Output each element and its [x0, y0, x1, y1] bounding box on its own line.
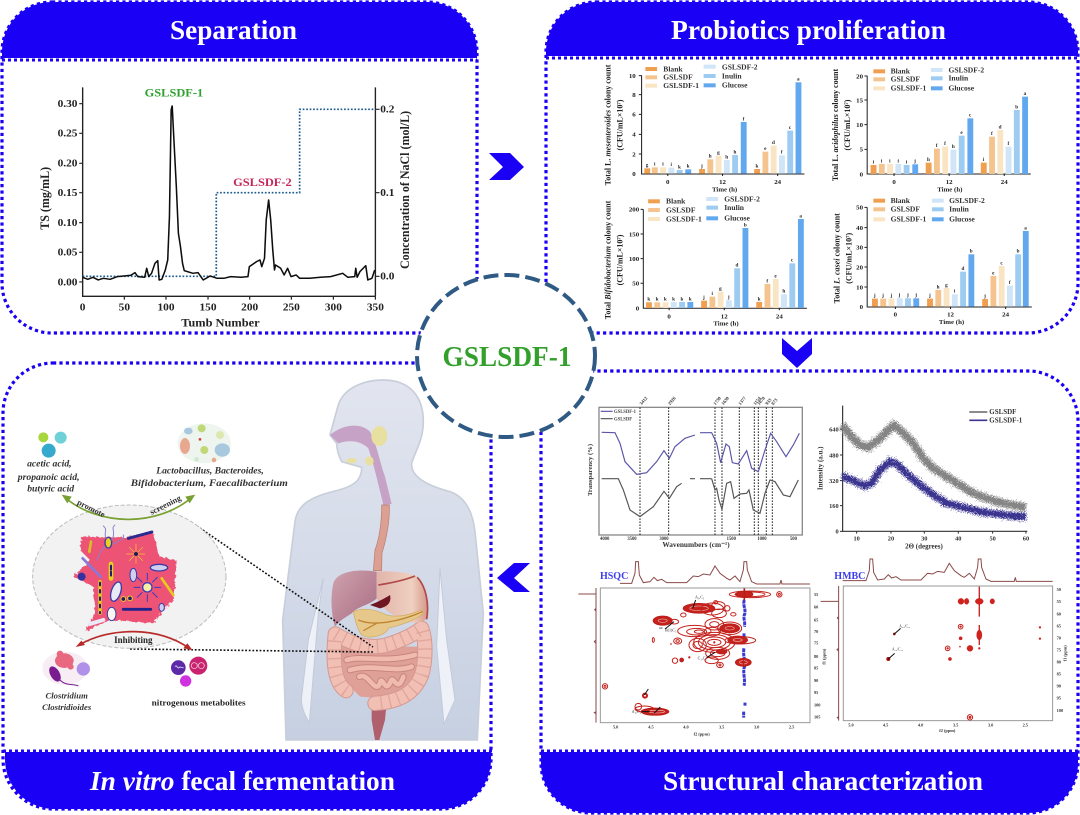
microbe blob [73, 533, 177, 632]
chart: XRD patterns: 30 [921, 535, 927, 542]
chart: HMBC spectrum: f2 (ppm) [939, 728, 956, 733]
chart: elution profile: 50 [119, 302, 130, 314]
panel: separation [2, 2, 477, 333]
chart: elution profile: 0.15 [58, 187, 78, 199]
chart: HSQC spectrum: 2.5 [789, 724, 794, 729]
stomach shadow [370, 595, 390, 608]
chart: HSQC spectrum: HSQC [600, 571, 628, 582]
label: clostridium [42, 690, 92, 712]
chart: HSQC spectrum: A₁,C₁ [632, 709, 642, 715]
chart: XRD patterns: Intensity (a.u.) [816, 446, 824, 490]
chart: FTIR spectra: 1078 [757, 396, 767, 407]
heading: Separation: Separation [170, 15, 297, 45]
chart: FTIR spectra: 1730 [713, 396, 723, 407]
panel: in vitro fecal fermentation [3, 363, 494, 809]
bar chart: L. acidophilus: GSLSDF [891, 75, 920, 84]
chart: elution profile: 350 [367, 302, 384, 314]
bar chart: L. casei: GSLSDF [891, 205, 920, 214]
bar chart: L. mesenteroides: 0 [632, 171, 636, 178]
chart: XRD patterns: 50 [989, 535, 996, 542]
chart: HMBC spectrum: 4.0 [918, 723, 923, 728]
bar chart: L. casei: jjjjjjjhgidbjecfba [873, 225, 1027, 299]
bar chart: L. mesenteroides: 6 [632, 112, 636, 119]
bar chart: L. acidophilus: 24 [1001, 179, 1008, 186]
chart: FTIR spectra: 1630 [721, 396, 731, 407]
bar chart: L. acidophilus: (CFU/mL×10⁷) [843, 99, 852, 150]
bar chart: L. casei: 12 [947, 312, 955, 319]
chart: HMBC spectrum: 4.5 [883, 723, 888, 728]
chart: HSQC spectrum: 4.5 [648, 724, 654, 729]
bar chart: L. acidophilus: 0 [892, 179, 896, 186]
bar chart: Bifidobacterium: GSLSDF [666, 205, 696, 214]
chart: elution profile [38, 86, 412, 330]
chart: elution profile: Concentration of NaCl (mol/L) [398, 111, 412, 269]
chart: HSQC spectrum: 5.0 [613, 724, 618, 729]
label: probiotic genera: Lactobacillus, Bacteroides, [155, 465, 264, 476]
chart: HSQC spectrum: 105 [814, 715, 820, 720]
chart: FTIR spectra: 2926 [668, 396, 678, 407]
bar chart: L. mesenteroides: giiikkjhghhfkedfca [646, 77, 800, 170]
bar chart: L. acidophilus: Inulin [948, 74, 969, 83]
label: probiotic genera: Bifidobacterium, Faecalibacterium [130, 478, 288, 489]
chart: HMBC spectrum: A₂₆/C₁ₐ [899, 624, 910, 628]
chart: HMBC spectrum: 55 [1057, 599, 1061, 604]
bar chart: Bifidobacterium [603, 194, 807, 328]
chart: elution profile: 0.0 [380, 271, 395, 283]
chart: HMBC spectrum [821, 559, 1068, 733]
chart: elution profile: 0.1 [380, 187, 394, 199]
label: acids [17, 459, 80, 495]
icon: nitrogenous metabolites [171, 657, 207, 687]
bar chart: Bifidobacterium: 0 [636, 305, 640, 312]
chart: XRD patterns: 320 [829, 478, 839, 485]
panel: structural characterization [541, 371, 1078, 813]
chart: FTIR spectra: GSLSDF [614, 417, 632, 422]
bar chart: L. mesenteroides: Glucose [722, 81, 748, 90]
salivary glands [346, 426, 387, 466]
chart: HMBC spectrum: 50 [1057, 587, 1061, 592]
label: nitrogenous metabolites: nitrogenous metabolites [152, 698, 246, 707]
bar chart: Bifidobacterium: 150 [629, 231, 640, 238]
chart: HMBC spectrum: 95 [1057, 696, 1061, 701]
chart: HSQC spectrum: 70 [814, 629, 818, 634]
chart: elution profile: 0.30 [58, 98, 78, 110]
chart: elution profile: 100 [157, 302, 175, 314]
bar chart: Bifidobacterium: Glucose [724, 214, 751, 223]
illustration: digestive organs [332, 570, 428, 740]
bar chart: L. acidophilus: Glucose [948, 84, 975, 93]
bar chart: L. acidophilus: GSLSDF-1 [891, 84, 927, 93]
label: acids: propanoic acid, [17, 472, 80, 483]
chart: FTIR spectra: 4000 [600, 537, 610, 542]
heading: Structural characterization: Structural characterization [663, 766, 983, 796]
chart: elution profile: 250 [283, 302, 300, 314]
chart: elution profile: GSLSDF-2 [233, 175, 292, 189]
chart: FTIR spectra: 873 [771, 398, 780, 407]
bar chart: L. casei [833, 196, 1032, 326]
bar chart: L. casei: 24 [1002, 312, 1010, 319]
bar chart: Bifidobacterium: Time (h) [713, 321, 739, 328]
chart: XRD patterns: 60 [1023, 535, 1029, 542]
chart: XRD patterns: 40 [955, 535, 961, 542]
bar chart: L. acidophilus: 15 [856, 97, 864, 104]
chart: HSQC spectrum: A₃,C₃ [695, 594, 705, 600]
chart: HMBC spectrum: 3.0 [988, 723, 993, 728]
chart: elution profile: 0.00 [58, 276, 78, 288]
microbiota oval [33, 505, 226, 648]
arrow: probiotics to structure [782, 338, 812, 368]
chart: HSQC spectrum: 75 [814, 641, 818, 646]
chart: HSQC spectrum: 3.0 [754, 724, 759, 729]
chart: FTIR spectra: 3412 [639, 396, 650, 407]
chart: XRD patterns: 640 [829, 427, 839, 434]
chart: elution profile: Tumb Number [181, 316, 260, 330]
bar chart: Bifidobacterium: GSLSDF-2 [724, 194, 760, 203]
bar chart: L. acidophilus: 5 [860, 147, 864, 154]
esophagus [373, 505, 389, 571]
bar chart: Bifidobacterium: Inulin [724, 203, 745, 212]
heading: Probiotics proliferation: Probiotics proliferation [671, 15, 946, 45]
icon: probiotic bacteria [178, 423, 231, 463]
chart: XRD patterns: GSLSDF-1 [989, 416, 1023, 424]
chart: HMBC spectrum: 2.5 [1023, 723, 1028, 728]
chart: elution profile: 0.25 [58, 128, 78, 140]
chart: elution profile: GSLSDF-1 [145, 86, 203, 100]
bar chart: L. mesenteroides: (CFU/mL×10⁷) [616, 99, 625, 150]
chart: HSQC spectrum: 3.5 [719, 724, 724, 729]
colon [334, 628, 425, 703]
bar chart: L. casei: Time (h) [939, 319, 964, 326]
chart: HSQC spectrum: 55 [814, 592, 818, 597]
arrow: separation to probiotics [489, 153, 524, 180]
bar chart: L. casei: Blank [891, 196, 911, 205]
heading bar: structural characterization [541, 752, 1078, 813]
bar chart: Bifidobacterium: kkkkkkjigjdbkfehca [647, 213, 802, 303]
small intestine [340, 647, 423, 700]
bar chart: Bifidobacterium: 0 [667, 313, 671, 320]
stomach [377, 571, 427, 623]
chart: HSQC spectrum: 65 [814, 617, 818, 622]
label: acids: butyric acid [27, 484, 74, 495]
bar chart: L. acidophilus: 10 [856, 122, 864, 129]
bar chart: L. mesenteroides: Inulin [722, 71, 742, 80]
chart: HSQC spectrum [578, 562, 827, 736]
bar chart: L. casei: 50 [856, 205, 864, 212]
bar chart: Bifidobacterium: Blank [666, 197, 686, 206]
central label: GSLSDF-1 [442, 341, 572, 373]
chart: XRD patterns: 0 [835, 529, 839, 536]
connector lines: gut to microbiota [130, 526, 373, 652]
bar chart: L. mesenteroides: 12 [719, 179, 727, 186]
bar chart: L. casei: Total L. casei colony count [833, 213, 842, 303]
label: probiotic genera [130, 465, 288, 489]
chart: FTIR spectra: Transparency (%) [587, 444, 594, 496]
bar chart: L. mesenteroides: GSLSDF-2 [722, 62, 758, 71]
chart: HMBC spectrum: HMBC [834, 571, 865, 582]
chart: XRD patterns: 20 [888, 535, 894, 542]
bar chart: L. casei: 10 [856, 284, 864, 291]
chart: HSQC spectrum: 95 [814, 690, 818, 695]
label: clostridium: Clostridium [45, 690, 88, 700]
icon: clostridium [42, 651, 90, 686]
bar chart: L. casei: Inulin [949, 205, 970, 214]
chart: HMBC spectrum: A₁₀/C₁ₐ [892, 648, 903, 652]
bar chart: L. acidophilus: Blank [891, 67, 911, 76]
bar chart: L. mesenteroides: 24 [774, 179, 782, 186]
chart: HSQC spectrum: 80 [814, 654, 818, 659]
bar chart: L. mesenteroides: 10 [629, 73, 636, 80]
bar charts group [603, 62, 1032, 328]
chart: HMBC spectrum: 85 [1057, 672, 1061, 677]
chart: XRD patterns: 160 [829, 503, 839, 510]
chart: elution profile: 0 [80, 302, 86, 314]
chart: FTIR spectra: 933 [765, 398, 774, 407]
bar chart: L. mesenteroides: 8 [632, 92, 636, 99]
bar chart: L. casei: 40 [856, 225, 864, 232]
chart: elution profile: TS (mg/mL) [38, 167, 52, 230]
heading bar: in vitro fecal fermentation [5, 752, 491, 809]
chart: XRD patterns [816, 406, 1029, 550]
chart: HSQC spectrum: f2 (ppm) [694, 731, 710, 736]
throat and mouth [330, 426, 392, 505]
chart: XRD patterns: GSLSDF [989, 408, 1016, 416]
chart: HMBC spectrum: 5.0 [848, 723, 854, 728]
chart: HMBC spectrum: 70 [1057, 635, 1061, 640]
arm gaps [301, 568, 455, 724]
chart: HMBC spectrum: f1 (ppm) [1063, 645, 1068, 661]
chart: HSQC spectrum: 85 [814, 666, 818, 671]
label: acids: acetic acid, [27, 459, 72, 470]
bar chart: Bifidobacterium: Total Bifidobacterium colony count [603, 200, 613, 319]
bar chart: Bifidobacterium: 50 [632, 281, 640, 288]
chart: FTIR spectra: 1154 [753, 396, 763, 407]
bar chart: L. mesenteroides: Time (h) [712, 186, 737, 193]
bar chart: Bifidobacterium: GSLSDF-1 [666, 214, 702, 223]
chart: HMBC spectrum: 3.5 [953, 723, 958, 728]
bar chart: L. casei: 20 [856, 264, 864, 271]
bar chart: L. casei: GSLSDF-2 [949, 196, 985, 205]
chart: HSQC spectrum: C₃,C₃ [698, 656, 707, 662]
heading bar: separation [2, 2, 477, 58]
body silhouette [283, 380, 483, 740]
chart: FTIR spectra: 1500 [727, 537, 737, 542]
bar chart: Bifidobacterium: (CFU/mL×10⁷) [616, 234, 625, 285]
bar chart: L. casei: (CFU/mL×10⁷) [845, 233, 854, 284]
microbes [78, 525, 173, 624]
chart: HMBC spectrum: 90 [1057, 684, 1061, 689]
icon: short-chain fatty acids [38, 432, 67, 458]
chart: elution profile: 150 [199, 302, 217, 314]
bar chart: L. acidophilus [831, 65, 1031, 193]
chart: HSQC spectrum: f1 (ppm) [822, 648, 827, 665]
chart: elution profile: 300 [325, 302, 342, 314]
heading: In vitro fecal fermentation: In vitro fecal fermentation [89, 766, 395, 796]
chart: FTIR spectra: 3000 [659, 537, 669, 542]
chart: XRD patterns: 10 [853, 535, 860, 542]
chart: XRD patterns: 2Θ (degrees) [905, 542, 943, 550]
bar chart: L. casei: Glucose [949, 215, 975, 224]
bar chart: Bifidobacterium: 12 [721, 313, 728, 320]
bar chart: L. mesenteroides [603, 62, 804, 193]
bar chart: L. mesenteroides: GSLSDF [663, 73, 693, 82]
chart: FTIR spectra: 500 [790, 537, 798, 542]
chart: XRD patterns: 480 [829, 452, 839, 459]
bar chart: L. acidophilus: Total L. acidophilus colony count [831, 69, 840, 181]
chart: FTIR spectra [587, 396, 802, 549]
chart: elution profile: 0.05 [58, 247, 78, 259]
bar chart: L. casei: 0 [894, 312, 898, 319]
bar chart: Bifidobacterium: 100 [629, 256, 640, 263]
bar chart: L. acidophilus: GSLSDF-2 [948, 65, 984, 74]
chart: HSQC spectrum: B(1)C₃ [665, 627, 677, 632]
chart: HSQC spectrum: aa [659, 625, 663, 630]
chart: HMBC spectrum: 80 [1057, 659, 1061, 664]
chart: HMBC spectrum: 75 [1057, 648, 1061, 653]
chart: FTIR spectra: 1000 [757, 537, 767, 542]
bar chart: L. casei: 0 [860, 304, 864, 311]
chart: HSQC spectrum: 100 [814, 702, 820, 707]
label: clostridium: Clostridioides [42, 702, 92, 712]
bar chart: L. mesenteroides: 4 [632, 132, 636, 139]
bar chart: L. casei: 30 [856, 245, 864, 252]
bar chart: Bifidobacterium: 24 [776, 313, 783, 320]
chart: FTIR spectra: 1377 [738, 396, 748, 407]
arrow: promote and screening [65, 498, 192, 519]
label: inhibiting: Inhibiting [114, 635, 153, 645]
pancreas [353, 609, 423, 637]
bar chart: L. mesenteroides: 0 [666, 179, 670, 186]
chart: elution profile: 200 [241, 302, 259, 314]
bar chart: L. acidophilus: 12 [946, 179, 953, 186]
illustration: gut microbiota and metabolites [17, 423, 288, 712]
arrow: structure to fermentation [497, 563, 530, 592]
chart: HSQC spectrum: 90 [814, 678, 818, 683]
chart: FTIR spectra: GSLSDF-1 [614, 410, 637, 415]
chart: FTIR spectra: Wavenumbers (cm⁻¹) [662, 540, 730, 549]
panel: probiotics proliferation [546, 2, 1078, 333]
chart: elution profile: 0.20 [58, 158, 78, 170]
bar chart: L. acidophilus: 20 [856, 73, 864, 80]
bar chart: L. mesenteroides: Total L. mesenteroides colony count [603, 64, 613, 185]
bar chart: L. casei: GSLSDF-1 [891, 215, 927, 224]
bar chart: L. mesenteroides: GSLSDF-1 [663, 81, 699, 90]
arrow: inhibiting [79, 632, 189, 648]
chart: elution profile: 0.10 [58, 217, 78, 229]
label: promote: promote [76, 498, 107, 519]
chart: HMBC spectrum: 65 [1057, 623, 1061, 628]
bar chart: Bifidobacterium: 200 [629, 207, 640, 214]
chart: elution profile: 0.2 [380, 104, 395, 116]
bar chart: L. acidophilus: iiiiijhffhecifdfba [873, 91, 1027, 165]
chart: HMBC spectrum: 100 [1057, 708, 1063, 713]
chart: HMBC spectrum: 60 [1057, 611, 1061, 616]
chart: FTIR spectra: 3500 [627, 537, 637, 542]
heading bar: probiotics proliferation [546, 2, 1078, 56]
bar chart: L. mesenteroides: Blank [663, 64, 684, 73]
bar chart: L. acidophilus: 0 [860, 171, 864, 178]
bar chart: L. acidophilus: Time (h) [937, 186, 962, 193]
bar chart: L. mesenteroides: 2 [632, 151, 636, 158]
chart: HSQC spectrum: 60 [814, 605, 818, 610]
liver [332, 570, 377, 627]
chart: HSQC spectrum: 4.0 [683, 724, 689, 729]
central badge: GSLSDF-1 [417, 275, 595, 437]
label: screening: screening [148, 493, 183, 517]
illustration: human body outline [283, 380, 483, 740]
rectum [372, 703, 387, 740]
